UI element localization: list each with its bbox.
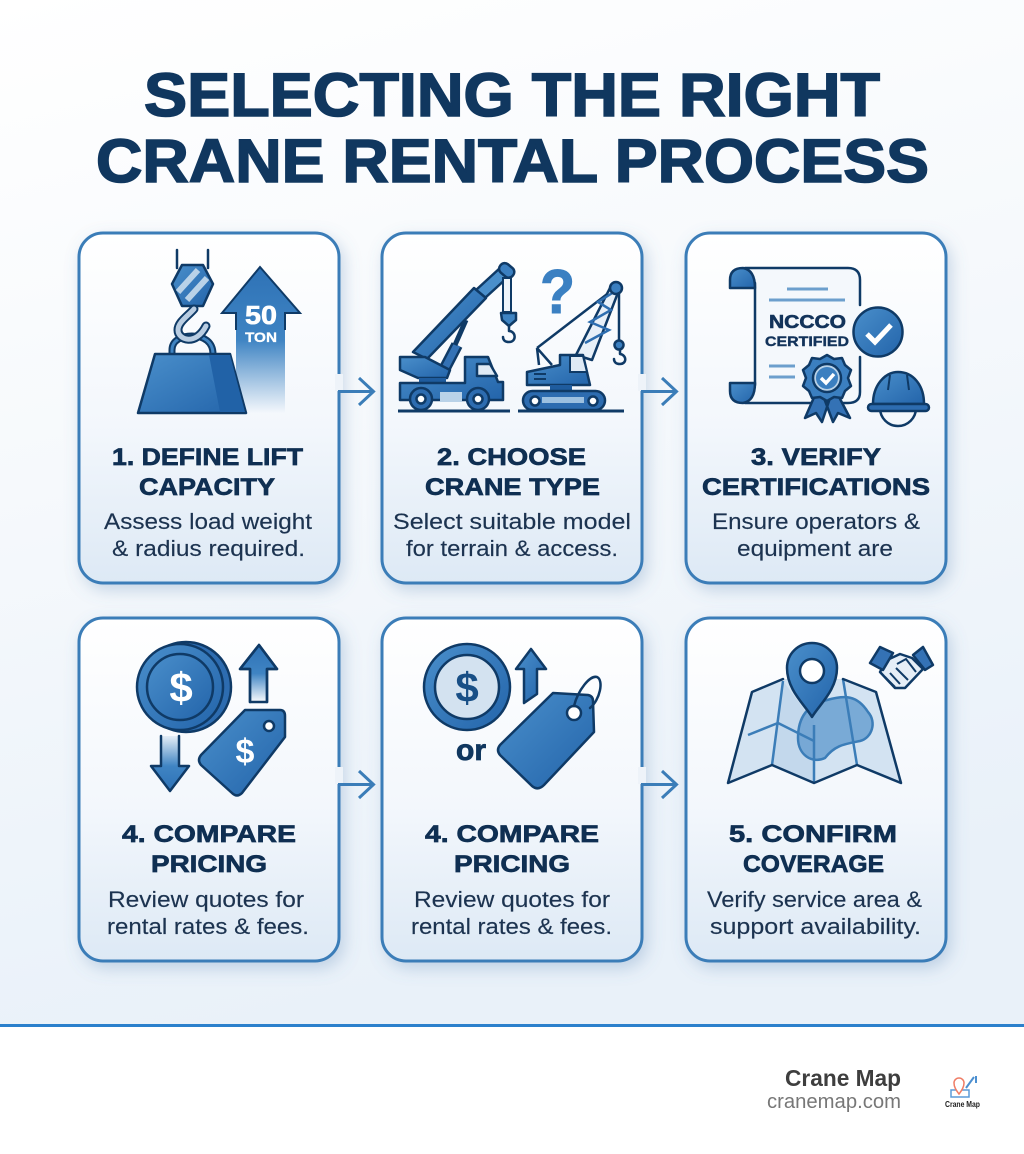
description: Review quotes for (108, 887, 304, 912)
panel: step 5 confirm coverage (686, 618, 946, 961)
icon: map with location pin and handshake (728, 643, 933, 783)
icon: hook lifting 50 ton weight: TON (245, 329, 277, 345)
heading (425, 444, 600, 501)
arrow: step 1 to step 2 (335, 374, 374, 405)
footer brand text: cranemap.com (767, 1091, 901, 1113)
heading: 2. CHOOSE (437, 444, 586, 471)
description: Ensure operators & (712, 509, 920, 534)
description (107, 887, 309, 939)
footer rule (0, 1024, 1024, 1027)
panel: step 4 compare pricing (79, 618, 339, 961)
icon: NCCCO certificate with badge and hard hat: NCCCO (769, 312, 846, 332)
footer brand text: Crane Map (785, 1065, 901, 1091)
icon: hook lifting 50 ton weight (138, 250, 300, 413)
heading: CRANE TYPE (425, 474, 600, 501)
icon: coin or price tag: or (456, 734, 486, 767)
description: equipment are (737, 536, 893, 561)
icon: coins, tag and price arrows: $ (236, 733, 255, 771)
icon: mobile crane truck (398, 261, 516, 411)
description: Assess load weight (104, 509, 312, 534)
heading: 5. CONFIRM (729, 821, 897, 848)
icon: NCCCO certificate with badge and hard hat: CERTIFIED (765, 333, 849, 349)
description: for terrain & access. (406, 536, 618, 561)
description (104, 509, 312, 561)
heading (702, 444, 930, 501)
icon: question mark: ? (540, 258, 575, 327)
heading: 1. DEFINE LIFT (112, 444, 303, 471)
description: Verify service area & (707, 887, 922, 912)
description: Review quotes for (414, 887, 610, 912)
heading: 4. COMPARE (122, 821, 296, 848)
heading: 3. VERIFY (751, 444, 881, 471)
title: SELECTING THE RIGHT (144, 61, 880, 129)
description (393, 509, 631, 561)
heading: PRICING (151, 851, 267, 878)
panel: step 1 define lift capacity (79, 233, 339, 583)
heading (425, 821, 599, 878)
description (411, 887, 612, 939)
arrow: step 4 to step 4 alternate (335, 767, 374, 798)
title (96, 61, 929, 195)
heading (729, 821, 897, 878)
footer logo: Crane Map (945, 1100, 980, 1109)
panel: step 2 choose crane type (382, 233, 642, 583)
description: support availability. (710, 914, 921, 939)
heading: CERTIFICATIONS (702, 474, 930, 501)
description (712, 509, 920, 561)
icon: coin or price tag (424, 644, 601, 788)
panel: step 4 compare pricing alternate (382, 618, 642, 961)
arrow: step 4 alternate to step 5 (638, 767, 676, 798)
description: rental rates & fees. (107, 914, 309, 939)
icon: coins, tag and price arrows (137, 642, 285, 796)
icon: hook lifting 50 ton weight: 50 (245, 300, 277, 330)
heading: COVERAGE (743, 851, 884, 878)
description: rental rates & fees. (411, 914, 612, 939)
icon: coin or price tag: $ (455, 664, 479, 711)
icon: NCCCO certificate with badge and hard hat (730, 268, 929, 426)
heading: PRICING (454, 851, 570, 878)
description: Select suitable model (393, 509, 631, 534)
panel: step 3 verify certifications (686, 233, 946, 583)
heading: CAPACITY (139, 474, 275, 501)
description: & radius required. (112, 536, 305, 561)
description (707, 887, 922, 939)
heading (112, 444, 303, 501)
footer brand text (767, 1065, 901, 1113)
arrow: step 2 to step 3 (638, 374, 676, 405)
heading (122, 821, 296, 878)
heading: 4. COMPARE (425, 821, 599, 848)
icon: coins, tag and price arrows: $ (169, 664, 193, 711)
icon: crawler crane (518, 282, 625, 411)
footer logo (945, 1076, 980, 1109)
title: CRANE RENTAL PROCESS (96, 127, 929, 195)
